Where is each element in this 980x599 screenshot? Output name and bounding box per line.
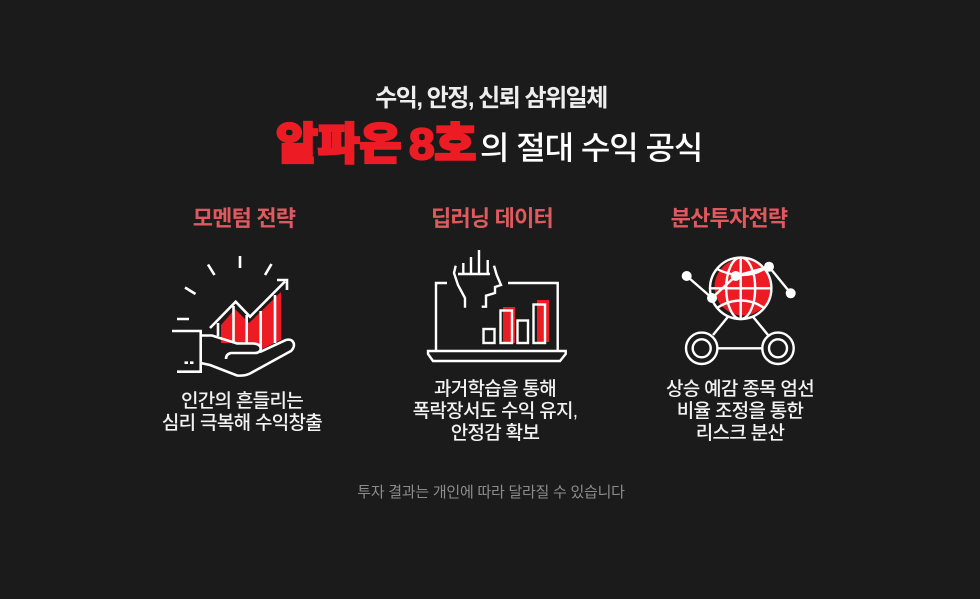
text: momentum description: 심리 극복해 수익창출	[162, 413, 322, 434]
column heading: momentum: 모멘텀 전략	[193, 206, 295, 231]
text: diversification description	[666, 379, 814, 444]
column heading: deep learning: 딥러닝 데이터	[431, 206, 553, 231]
text: deep learning description	[413, 379, 577, 444]
column heading: diversification: 분산투자전략	[671, 206, 787, 231]
subtitle: 수익, 안정, 신뢰 삼위일체	[375, 85, 607, 112]
text: diversification description: 상승 예감 종목 엄선	[666, 379, 814, 400]
text: diversification description: 리스크 분산	[696, 423, 784, 444]
title highlight: fund name: 알파온 8호	[276, 120, 476, 169]
title	[276, 120, 702, 169]
title remainder: 의 절대 수익 공식	[480, 130, 702, 166]
text: deep learning description: 과거학습을 통해	[434, 379, 556, 400]
text: diversification description: 비율 조정을 통한	[677, 401, 803, 422]
text: momentum description	[162, 391, 322, 434]
text: deep learning description: 안정감 확보	[451, 423, 539, 444]
disclaimer: 투자 결과는 개인에 따라 달라질 수 있습니다	[357, 484, 625, 501]
text: deep learning description: 폭락장서도 수익 유지,	[413, 401, 577, 422]
text: momentum description: 인간의 흔들리는	[181, 391, 303, 412]
